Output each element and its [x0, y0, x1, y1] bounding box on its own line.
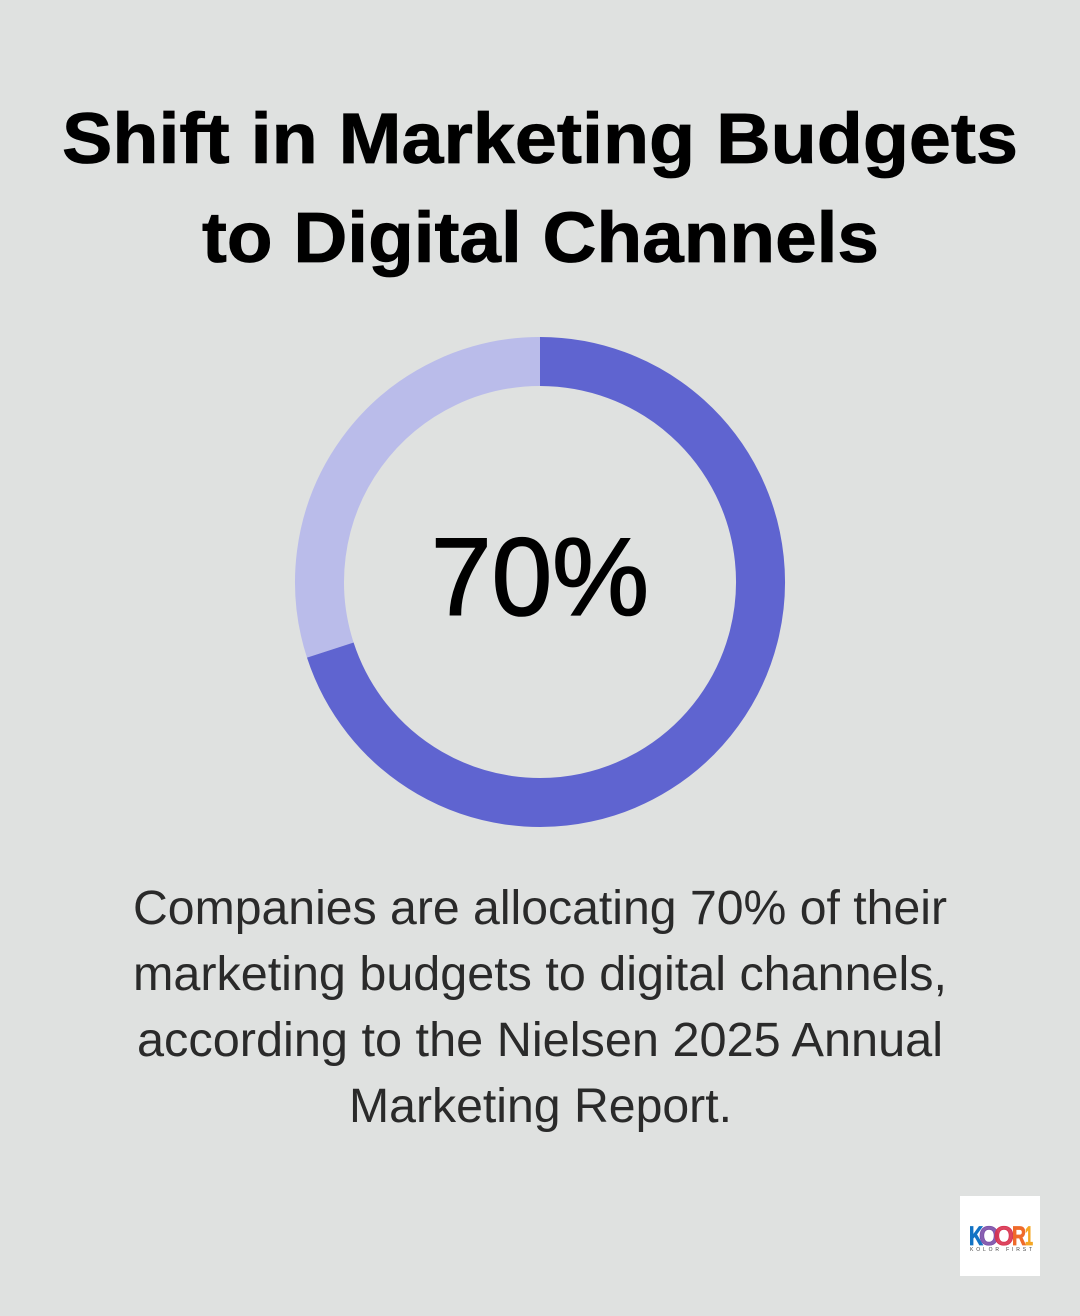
description text: marketing budgets to digital channels, — [133, 948, 947, 1001]
logo: KOOR1: O — [979, 1221, 999, 1251]
donut chart: 70 percent — [320, 362, 761, 802]
logo: KOOR1: R — [1012, 1221, 1026, 1251]
logo: KOOR1: KOLOR FIRST — [970, 1247, 1032, 1253]
title: to Digital Channels — [202, 199, 879, 278]
title: Shift in Marketing Budgets — [62, 100, 1018, 179]
logo: KOOR1: O — [994, 1221, 1014, 1251]
description text: Marketing Report. — [349, 1080, 732, 1133]
description text — [133, 882, 947, 1133]
description text: Companies are allocating 70% of their — [133, 882, 947, 935]
center value: 70% — [431, 516, 649, 639]
logo: KOOR1: 1 — [1025, 1221, 1033, 1251]
description text: according to the Nielsen 2025 Annual — [137, 1014, 943, 1067]
logo: KOOR1: K — [969, 1221, 983, 1251]
title — [62, 100, 1018, 278]
logo: KOOR1 — [960, 1196, 1040, 1276]
remaining 30 percent segment — [320, 362, 540, 650]
70 percent segment — [330, 362, 761, 802]
